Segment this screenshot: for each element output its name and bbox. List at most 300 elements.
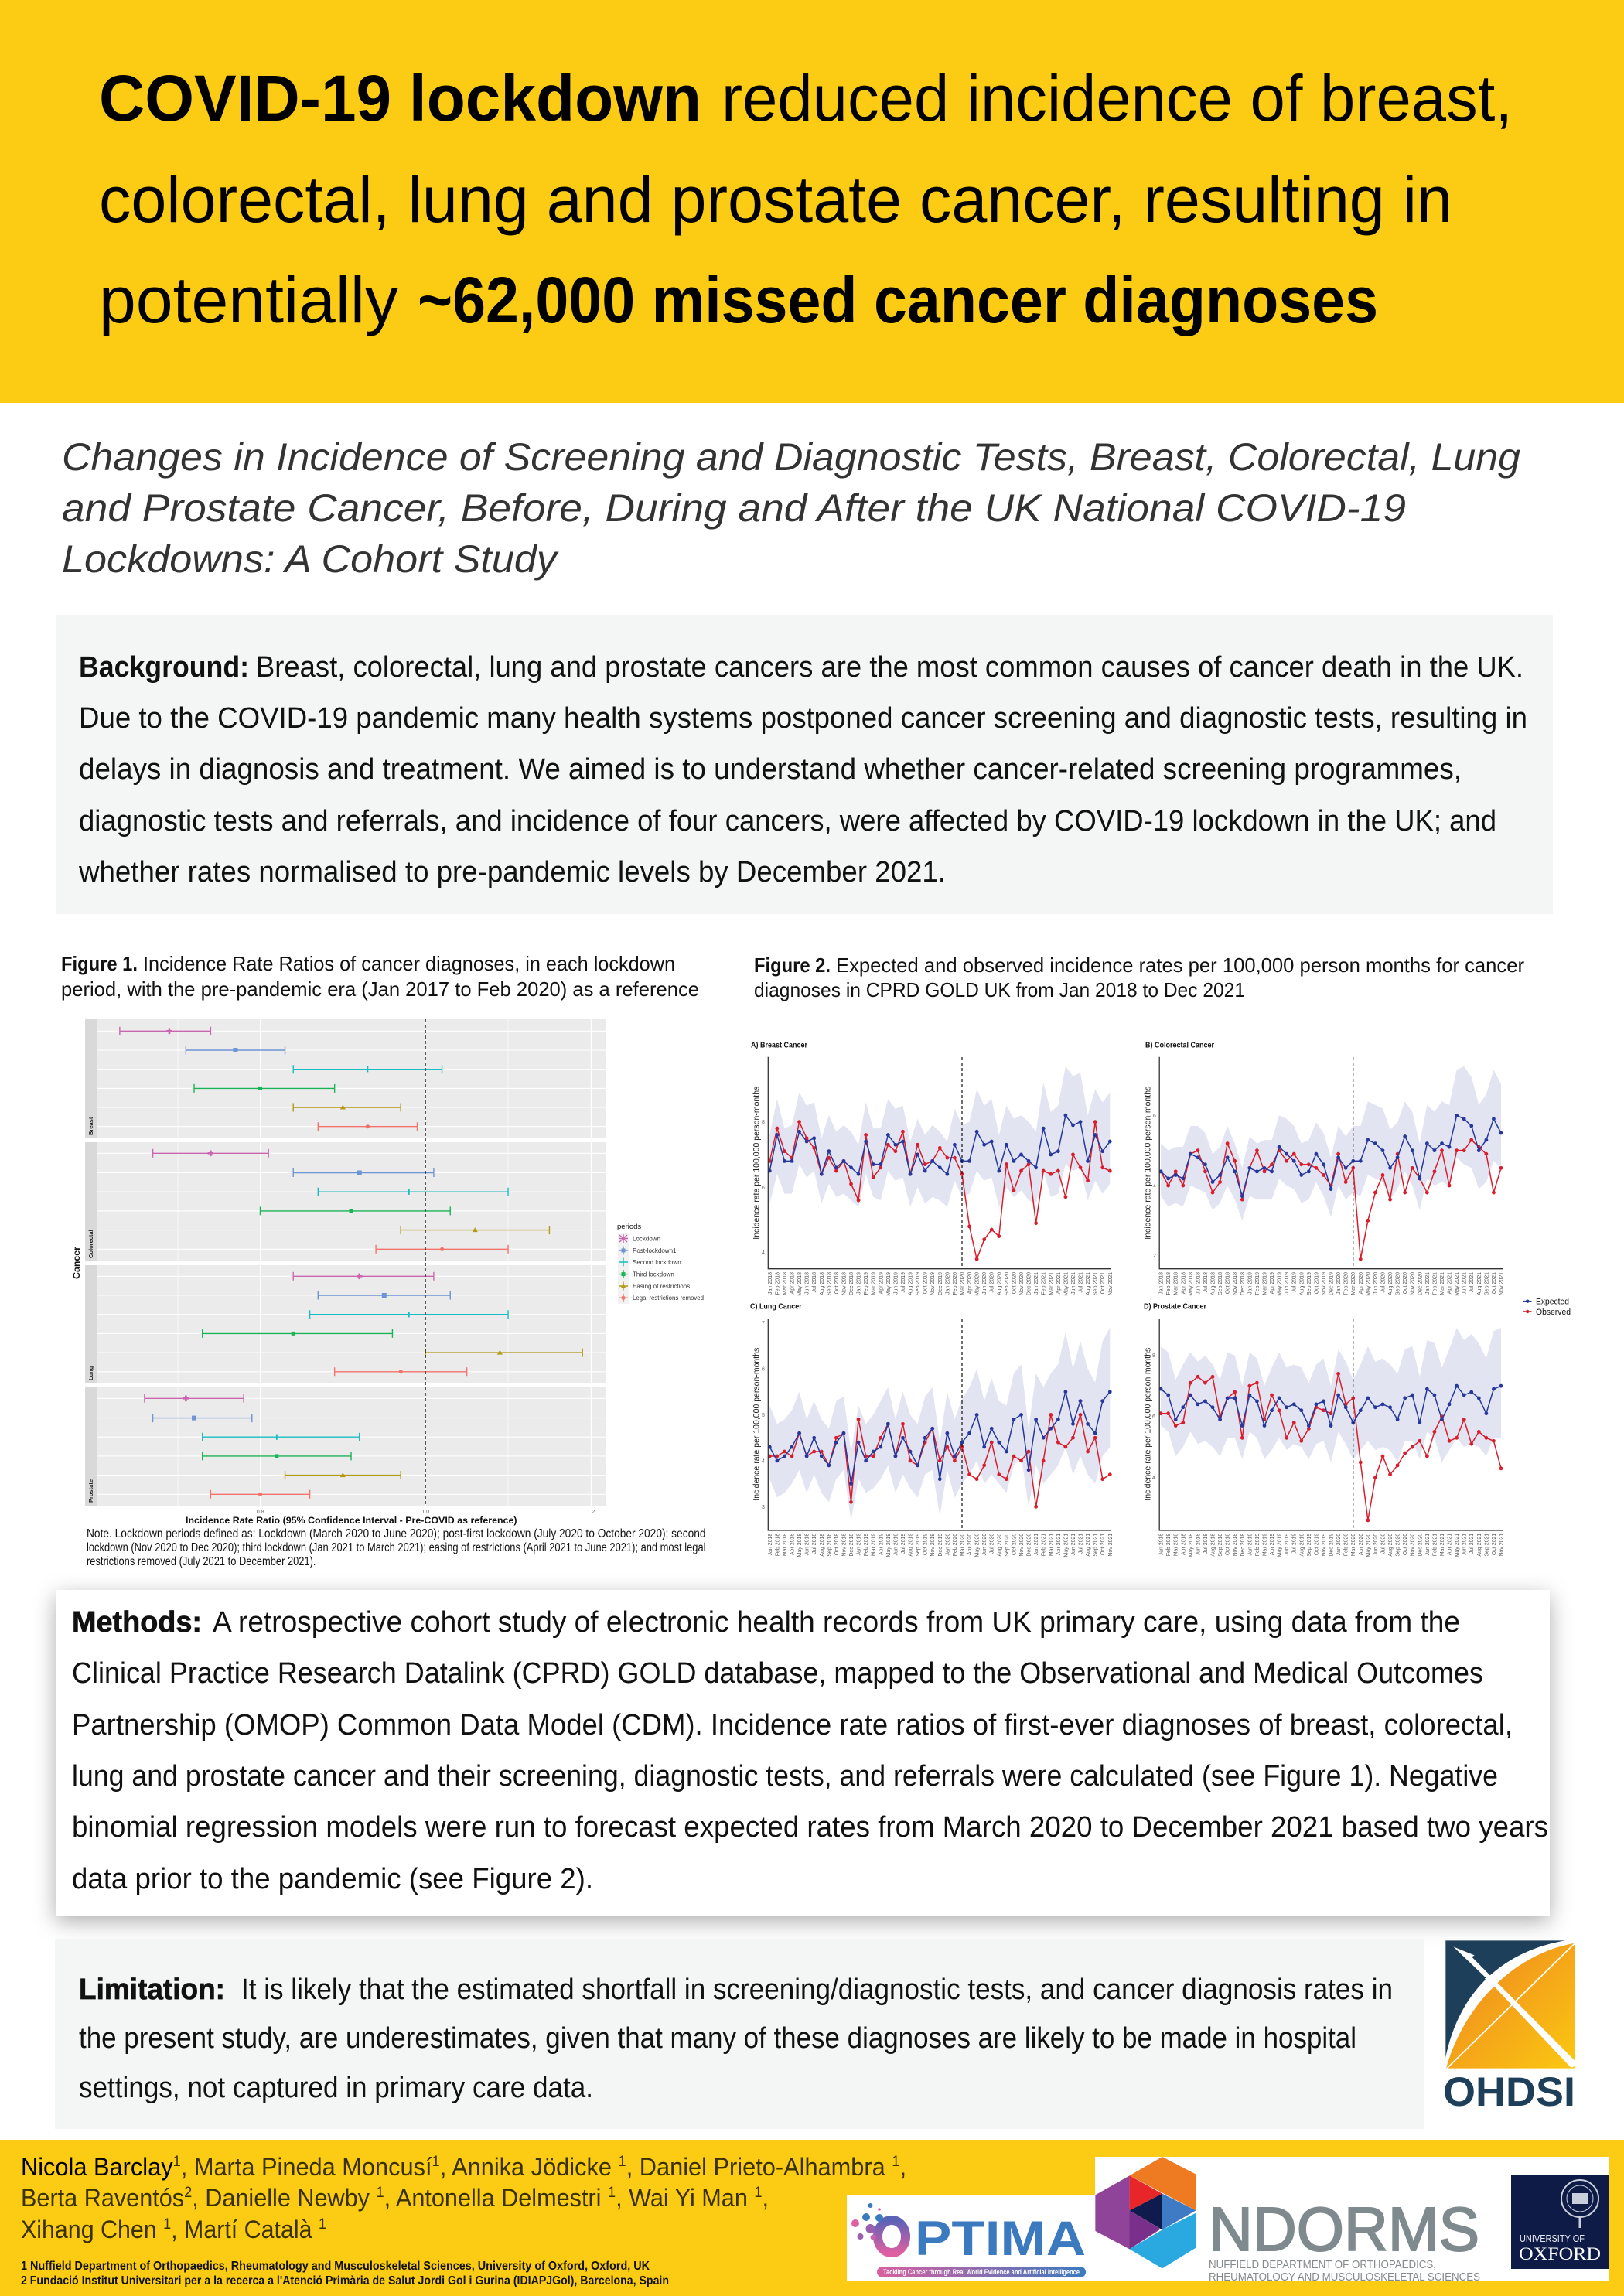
chart D month axis: Aug 2018	[1211, 1534, 1216, 1557]
chart D month axis: Aug 2020	[1388, 1534, 1394, 1557]
chart B month axis: Oct 2021	[1492, 1272, 1497, 1294]
chart D month axis: Dec 2019	[1329, 1534, 1335, 1557]
figure 1 caption	[61, 952, 699, 1001]
figure 2 caption: Expected and observed incidence rates per 100,000 person months for cancer	[836, 954, 1524, 977]
affiliations	[21, 2260, 669, 2287]
chart A month axis: May 2019	[886, 1272, 892, 1296]
chart B month axis: Jun 2020	[1373, 1272, 1379, 1295]
NDORMS subtitle: RHEUMATOLOGY AND MUSCULOSKELETAL SCIENCES	[1209, 2270, 1480, 2284]
background text: diagnostic tests and referrals, and incidence of four cancers, were affected by COVID-19 lockdown in the UK; and	[79, 805, 1496, 838]
authors: ,	[762, 2184, 769, 2212]
chart C month axis: Feb 2021	[1042, 1534, 1047, 1556]
chart B y ticks: 4	[1153, 1183, 1156, 1189]
chart B month axis: Jun 2018	[1196, 1272, 1201, 1295]
chart A y ticks	[762, 1120, 765, 1256]
lockdown series	[120, 1027, 434, 1403]
limitation text: the present study, are underestimates, given that many of these diagnoses are likely to be made in hospital	[79, 2022, 1356, 2055]
chart B month axis: Aug 2018	[1211, 1272, 1216, 1295]
forest plot legend: periods	[617, 1223, 641, 1231]
chart A month axis: Apr 2020	[967, 1272, 973, 1294]
chart C month axis: Nov 2019	[930, 1534, 936, 1557]
chart C month axis: Feb 2020	[953, 1534, 958, 1556]
chart C month axis: Oct 2020	[1012, 1534, 1017, 1555]
chart A month axis: Feb 2019	[864, 1272, 869, 1295]
chart C month axis: Aug 2018	[820, 1534, 825, 1557]
strip labels: Colorectal	[87, 1230, 94, 1258]
chart A y label: Incidence rate per 100,000 person-months	[752, 1086, 762, 1240]
figure 1 caption: Incidence Rate Ratios of cancer diagnoses, in each lockdown	[143, 952, 675, 975]
chart A month axis: Mar 2019	[872, 1272, 877, 1295]
chart C month axis: Aug 2020	[997, 1534, 1002, 1557]
chart A month axis: Jan 2018	[768, 1272, 773, 1295]
figure 1 caption: Figure 1.	[61, 952, 138, 975]
chart C month axis: Feb 2018	[775, 1534, 780, 1556]
chart C band and lines	[769, 1328, 1110, 1520]
methods text	[72, 1606, 1548, 1895]
chart A axes	[768, 1057, 1111, 1269]
chart B month axis: May 2021	[1455, 1272, 1460, 1296]
chart D month axis: May 2018	[1189, 1534, 1194, 1557]
chart A month axis: Sep 2018	[827, 1272, 832, 1295]
chart D month axis: Feb 2020	[1344, 1534, 1349, 1556]
chart A month axis: Jun 2018	[805, 1272, 810, 1295]
chart D month axis: Jan 2020	[1336, 1534, 1342, 1556]
chart B month axis: Apr 2020	[1359, 1272, 1364, 1294]
figure 1 note	[87, 1527, 705, 1568]
figure 2 caption: diagnoses in CPRD GOLD UK from Jan 2018 to Dec 2021	[754, 978, 1245, 1001]
authors: 1	[376, 2185, 384, 2201]
figure 2 legend: Observed	[1536, 1308, 1571, 1317]
chart B month axis: Oct 2018	[1226, 1272, 1231, 1294]
subtitle	[62, 435, 1520, 581]
chart A month axis: Oct 2018	[834, 1272, 840, 1294]
chart A month axis: Sep 2019	[916, 1272, 921, 1295]
chart D month axis: Oct 2021	[1492, 1534, 1497, 1555]
reference line at 1.0	[425, 1019, 426, 1506]
authors: ,	[899, 2153, 906, 2181]
panel: limitation	[55, 1939, 1424, 2129]
chart C axes	[768, 1319, 1111, 1530]
NDORMS subtitle: NUFFIELD DEPARTMENT OF ORTHOPAEDICS,	[1209, 2258, 1436, 2271]
chart B month axis: Apr 2021	[1448, 1272, 1453, 1294]
chart B month axis: Dec 2018	[1240, 1272, 1246, 1295]
OHDSI emblem	[1445, 1940, 1575, 2069]
chart B month axis: Feb 2019	[1255, 1272, 1261, 1295]
legal restrictions removed series	[210, 1122, 508, 1499]
chart D month axis: Nov 2019	[1322, 1534, 1327, 1557]
chart C month axis: Mar 2019	[872, 1534, 877, 1556]
forest plot legend	[617, 1223, 704, 1304]
chart C month axis: Jan 2018	[768, 1534, 773, 1556]
chart B month axis: Mar 2020	[1351, 1272, 1356, 1295]
chart D month axis: Apr 2021	[1448, 1534, 1453, 1555]
Oxford wordmark: OXFORD	[1519, 2244, 1601, 2264]
chart D month axis: Apr 2018	[1181, 1534, 1186, 1555]
chart C month axis: Jul 2021	[1079, 1534, 1084, 1554]
chart B month axis: Jun 2021	[1462, 1272, 1468, 1295]
chart C month axis: Sep 2021	[1093, 1534, 1099, 1557]
chart D month axis: Mar 2018	[1174, 1534, 1179, 1556]
chart C month axis: Sep 2019	[916, 1534, 921, 1557]
chart C march 2020 marker	[961, 1319, 963, 1530]
panel: methods	[56, 1590, 1550, 1916]
chart C month axis: Nov 2021	[1108, 1534, 1114, 1557]
chart A month axis: Apr 2018	[790, 1272, 795, 1294]
forest plot panels	[85, 1019, 606, 1506]
figure 1 forest plot	[71, 1019, 705, 1568]
chart C month axis: Jun 2020	[982, 1534, 988, 1556]
chart B month axis: Apr 2018	[1181, 1272, 1186, 1294]
chart C month axis: Apr 2020	[967, 1534, 973, 1555]
chart B month axis: May 2018	[1189, 1272, 1194, 1296]
chart B month axis: Jan 2020	[1336, 1272, 1342, 1295]
chart D month axis: Oct 2020	[1403, 1534, 1408, 1555]
chart D month axis: Jun 2018	[1196, 1534, 1201, 1556]
figure 1 note: Note. Lockdown periods defined as: Lockdown (March 2020 to June 2020); post-first lockdown (July 2020 to October 2020); second	[87, 1527, 705, 1540]
chart C month axis: May 2018	[797, 1534, 803, 1557]
limitation text: It is likely that the estimated shortfall in screening/diagnostic tests, and cancer diagnosis rates in	[241, 1974, 1393, 2006]
forest plot legend: Third lockdown	[633, 1271, 674, 1278]
chart D month axis: Nov 2018	[1233, 1534, 1238, 1557]
chart C: lung cancer	[750, 1302, 1111, 1530]
chart A band and lines	[769, 1066, 1110, 1259]
OPTIMA wordmark: PTIMA	[915, 2212, 1086, 2266]
authors: , Antonella Delmestri	[384, 2184, 608, 2212]
NDORMS hexagon	[1095, 2157, 1196, 2268]
chart B y ticks	[1153, 1114, 1156, 1259]
chart D month axis: Sep 2019	[1307, 1534, 1312, 1557]
methods text: binomial regression models were run to forecast expected rates from March 2020 to December 2021 based two years	[72, 1811, 1548, 1844]
chart D month axis: Jan 2018	[1159, 1534, 1165, 1556]
chart C month axis: Mar 2020	[960, 1534, 965, 1556]
chart A month axis: Mar 2020	[960, 1272, 965, 1295]
chart B month axis: Feb 2018	[1166, 1272, 1172, 1295]
chart B march 2020 marker	[1353, 1057, 1354, 1268]
background text: Breast, colorectal, lung and prostate cancers are the most common causes of cancer death in the UK.	[256, 651, 1523, 684]
chart B month axis: Apr 2019	[1270, 1272, 1275, 1294]
chart D: prostate cancer	[1143, 1302, 1503, 1530]
authors: Xihang Chen	[21, 2216, 164, 2243]
chart C month axis: Jan 2019	[857, 1534, 862, 1556]
authors: 1	[754, 2185, 762, 2201]
chart D axes	[1159, 1319, 1503, 1530]
Oxford wordmark	[1519, 2233, 1601, 2264]
background text: Due to the COVID-19 pandemic many health systems postponed cancer screening and diagnostic tests, resulting in	[79, 702, 1527, 735]
figure 2 caption: Figure 2.	[754, 954, 831, 977]
methods text: lung and prostate cancer and their screening, diagnostic tests, and referrals were calculated (see Figure 1). Negative	[72, 1760, 1498, 1793]
chart C month axis: Jan 2021	[1034, 1534, 1039, 1556]
chart C y ticks: 4	[762, 1458, 765, 1465]
chart D month axis: Jun 2020	[1373, 1534, 1379, 1556]
chart B month axis: Sep 2020	[1396, 1272, 1401, 1295]
forest plot legend: Lockdown	[633, 1235, 660, 1242]
authors: 1	[619, 2154, 626, 2170]
chart C month axis: Jul 2020	[990, 1534, 995, 1554]
chart D month axis: Aug 2019	[1299, 1534, 1305, 1557]
background text: whether rates normalised to pre-pandemic levels by December 2021.	[78, 856, 946, 889]
chart A y ticks: 6	[762, 1186, 765, 1191]
chart D month axis: Jul 2019	[1292, 1534, 1298, 1554]
OPTIMA tagline: Tackling Cancer through Real World Evidence and Artificial Intelligence	[883, 2268, 1080, 2276]
OPTIMA icon	[851, 2203, 906, 2253]
chart A month axis: Jul 2019	[901, 1272, 906, 1292]
second lockdown series	[203, 1065, 508, 1441]
chart C month axis: Apr 2021	[1056, 1534, 1062, 1555]
logo: NDORMS	[1095, 2157, 1609, 2284]
limitation text	[79, 1974, 1393, 2104]
chart B month axis: Nov 2020	[1411, 1272, 1416, 1295]
chart C month axis: Oct 2018	[834, 1534, 840, 1555]
chart C y ticks: 7	[762, 1321, 765, 1326]
chart D month axis: May 2021	[1455, 1534, 1460, 1557]
chart A month axis: Jul 2018	[812, 1272, 817, 1292]
chart C month axis: Jul 2019	[901, 1534, 906, 1554]
forest plot legend: Legal restrictions removed	[633, 1295, 704, 1302]
chart A month axis: Feb 2018	[775, 1272, 780, 1295]
figure 2 caption	[754, 954, 1524, 1001]
chart A title: A) Breast Cancer	[751, 1041, 807, 1050]
chart D month axis: Dec 2018	[1240, 1534, 1246, 1557]
chart A month axis: May 2018	[797, 1272, 803, 1296]
confidence interval bars	[120, 1027, 582, 1499]
chart A month axis: May 2021	[1063, 1272, 1069, 1296]
chart A month axis: May 2020	[975, 1272, 981, 1296]
chart B title: B) Colorectal Cancer	[1145, 1041, 1214, 1050]
chart A march 2020 marker	[961, 1057, 963, 1268]
chart D month axis: Jan 2021	[1425, 1534, 1431, 1556]
chart C month axis: Mar 2018	[783, 1534, 788, 1556]
chart A month axis: Mar 2018	[783, 1272, 788, 1295]
x axis ticks: 0.8	[257, 1510, 264, 1515]
forest plot legend: Post-lockdown1	[633, 1247, 677, 1254]
chart D march 2020 marker	[1353, 1319, 1354, 1530]
chart C month axis: May 2020	[975, 1534, 981, 1557]
authors: , Annika Jödicke	[440, 2153, 619, 2181]
chart B month axis: Aug 2021	[1477, 1272, 1482, 1295]
NDORMS subtitle	[1209, 2258, 1480, 2284]
chart D band and lines	[1161, 1328, 1501, 1520]
authors	[21, 2153, 906, 2243]
chart B month axis: Nov 2019	[1322, 1272, 1327, 1295]
authors: , Danielle Newby	[192, 2184, 376, 2212]
chart A month axis: Jun 2019	[893, 1272, 899, 1295]
forest plot legend: Second lockdown	[633, 1259, 681, 1266]
chart B month axis: Dec 2020	[1418, 1272, 1423, 1295]
chart B month axis: Mar 2019	[1262, 1272, 1267, 1295]
chart C month axis: Nov 2018	[841, 1534, 847, 1557]
methods text: A retrospective cohort study of electronic health records from UK primary care, using data from the	[213, 1606, 1460, 1639]
x axis ticks: 1.0	[421, 1510, 429, 1515]
forest plot legend: Easing of restrictions	[633, 1283, 690, 1290]
chart C y label: Incidence rate per 100,000 person-months	[752, 1347, 762, 1501]
title: potentially	[99, 264, 398, 336]
chart A month axis: Jun 2021	[1071, 1272, 1076, 1295]
chart B y label: Incidence rate per 100,000 person-months	[1143, 1086, 1152, 1240]
figure 2 legend	[1523, 1298, 1571, 1317]
chart A month axis: Oct 2020	[1012, 1272, 1017, 1294]
chart B month axis: Jul 2021	[1469, 1272, 1475, 1292]
chart A month axis: Aug 2018	[820, 1272, 825, 1295]
chart A month axis: Apr 2021	[1056, 1272, 1062, 1294]
chart A month axis: Nov 2018	[841, 1272, 847, 1295]
figure 1 note: restrictions removed (July 2021 to December 2021).	[87, 1555, 316, 1568]
chart B month axis: Jun 2019	[1285, 1272, 1290, 1295]
chart C month axis: Jun 2021	[1071, 1534, 1076, 1556]
chart B month axis: Jul 2018	[1203, 1272, 1209, 1292]
authors: , Daniel Prieto-Alhambra	[626, 2153, 892, 2181]
methods text: Partnership (OMOP) Common Data Model (CDM). Incidence rate ratios of first-ever diagnoses of breast, colorectal,	[72, 1709, 1513, 1742]
chart C month axis: Oct 2019	[923, 1534, 929, 1555]
chart A month axis: Jan 2021	[1034, 1272, 1039, 1295]
chart D month axis: Oct 2018	[1226, 1534, 1231, 1555]
chart A month axis: Aug 2021	[1086, 1272, 1091, 1295]
chart C month axis: May 2019	[886, 1534, 892, 1557]
chart B month axis: Oct 2019	[1314, 1272, 1319, 1294]
limitation text: settings, not captured in primary care data.	[79, 2072, 593, 2104]
subtitle: and Prostate Cancer, Before, During and After the UK National COVID-19	[62, 486, 1406, 530]
chart B month axis: May 2019	[1278, 1272, 1283, 1296]
chart A month axis: Jun 2020	[982, 1272, 988, 1295]
affiliations: 1 Nuffield Department of Orthopaedics, Rheumatology and Musculoskeletal Sciences, University of Oxford, Oxford, UK	[21, 2260, 650, 2273]
title: reduced incidence of breast,	[722, 62, 1513, 135]
chart D month axis: Jul 2018	[1203, 1534, 1209, 1554]
chart C month axis: Dec 2020	[1027, 1534, 1032, 1557]
chart C y ticks	[762, 1321, 765, 1510]
chart A month axis: Dec 2020	[1027, 1272, 1032, 1295]
chart C y ticks: 3	[762, 1505, 765, 1510]
figure 2 legend: Expected	[1536, 1298, 1569, 1307]
OHDSI wordmark: OHDSI	[1443, 2069, 1575, 2115]
affiliations: 2 Fundació Institut Universitari per a la recerca a l'Atenció Primària de Salut Jordi Gol i Gurina (IDIAPJGol), Barcelona, Spain	[21, 2274, 669, 2287]
limitation text: Limitation:	[79, 1974, 225, 2006]
figure 1 caption: period, with the pre-pandemic era (Jan 2017 to Feb 2020) as a reference	[61, 977, 699, 1001]
background text: delays in diagnosis and treatment. We aimed is to understand whether cancer-related screening programmes,	[79, 753, 1462, 786]
chart B month axis: Nov 2021	[1499, 1272, 1504, 1295]
chart A month axis: Aug 2019	[909, 1272, 914, 1295]
authors: 2	[184, 2185, 192, 2201]
NDORMS wordmark: NDORMS	[1209, 2195, 1479, 2264]
chart B month axis: Mar 2018	[1174, 1272, 1179, 1295]
chart C month axis: Aug 2021	[1086, 1534, 1091, 1557]
chart B month axis: Nov 2018	[1233, 1272, 1238, 1295]
chart B y ticks: 6	[1153, 1114, 1156, 1119]
chart C month axis: Dec 2019	[938, 1534, 943, 1557]
chart B month axis: Jul 2019	[1292, 1272, 1298, 1292]
chart A month axis: Dec 2018	[849, 1272, 855, 1295]
chart D month axis: Mar 2021	[1440, 1534, 1445, 1556]
chart C month axis: Oct 2021	[1100, 1534, 1106, 1555]
authors: 1	[173, 2154, 181, 2170]
chart A month axis: Nov 2021	[1108, 1272, 1114, 1295]
chart D month axis: Sep 2018	[1218, 1534, 1223, 1557]
chart A month axis: Jul 2021	[1079, 1272, 1084, 1292]
chart A y ticks: 4	[762, 1250, 765, 1256]
chart A month axis: Jul 2020	[990, 1272, 995, 1292]
chart B month axis: Sep 2021	[1484, 1272, 1489, 1295]
chart C month axis: Aug 2019	[909, 1534, 914, 1557]
chart B month axis: May 2020	[1366, 1272, 1371, 1296]
header banner	[0, 0, 1624, 403]
chart B axes	[1159, 1057, 1503, 1269]
chart A month axis: Nov 2019	[930, 1272, 936, 1295]
chart C month axis: Jun 2019	[893, 1534, 899, 1556]
chart D title: D) Prostate Cancer	[1144, 1302, 1206, 1312]
chart D month axis: Sep 2021	[1484, 1534, 1489, 1557]
Oxford crest	[1561, 2180, 1598, 2228]
chart D month axis: Jul 2021	[1469, 1534, 1475, 1554]
title: colorectal, lung and prostate cancer, resulting in	[99, 163, 1452, 236]
chart A month axis: Oct 2019	[923, 1272, 929, 1294]
panel: background	[56, 615, 1553, 914]
chart C month axis: Feb 2019	[864, 1534, 869, 1556]
x axis ticks: 1.2	[588, 1510, 595, 1515]
chart B month axis: Jan 2019	[1247, 1272, 1253, 1295]
chart D month axis: May 2019	[1278, 1534, 1283, 1557]
chart D month axis: Mar 2019	[1262, 1534, 1267, 1556]
methods text: data prior to the pandemic (see Figure 2).	[72, 1863, 593, 1895]
x axis ticks	[257, 1510, 595, 1515]
chart C month axis: May 2021	[1063, 1534, 1069, 1557]
figure 1 note: lockdown (Nov 2020 to Dec 2020); third lockdown (Jan 2021 to March 2021); easing of restrictions (April 2021 to June 2021); and most legal	[87, 1541, 705, 1554]
chart D month axis: Jun 2021	[1462, 1534, 1468, 1556]
footer band	[0, 2140, 1624, 2296]
title: ~62,000 missed cancer diagnoses	[418, 264, 1378, 336]
chart B y ticks: 2	[1153, 1254, 1156, 1259]
chart D month axis: Jun 2019	[1285, 1534, 1290, 1556]
chart B month axis: Sep 2019	[1307, 1272, 1312, 1295]
chart A month axis: Feb 2020	[953, 1272, 958, 1295]
chart A month axis: Sep 2020	[1005, 1272, 1010, 1295]
logo: OPTIMA	[847, 2195, 1095, 2281]
title	[99, 62, 1513, 336]
chart D month axis: May 2020	[1366, 1534, 1371, 1557]
chart B month axis: Feb 2020	[1344, 1272, 1349, 1295]
chart A month axis: Mar 2021	[1049, 1272, 1054, 1295]
chart D month axis: Sep 2020	[1396, 1534, 1401, 1557]
chart A y ticks: 8	[762, 1120, 765, 1125]
chart C month axis: Nov 2020	[1019, 1534, 1025, 1557]
logo: University of Oxford	[1511, 2175, 1609, 2269]
chart C month axis: Sep 2020	[1005, 1534, 1010, 1557]
chart C title: C) Lung Cancer	[750, 1302, 802, 1312]
chart C y ticks: 6	[762, 1367, 765, 1372]
authors: 1	[608, 2185, 616, 2201]
chart C month axis: Dec 2018	[849, 1534, 855, 1557]
authors: Berta Raventós	[21, 2184, 192, 2212]
chart D month axis: Aug 2021	[1477, 1534, 1482, 1557]
chart A: breast cancer	[751, 1041, 1111, 1269]
chart B: colorectal cancer	[1143, 1041, 1503, 1269]
methods text: Clinical Practice Research Datalink (CPRD) GOLD database, mapped to the Observational and Medical Outcomes	[72, 1657, 1483, 1690]
authors: 1	[892, 2154, 899, 2170]
chart D month axis: Mar 2020	[1351, 1534, 1356, 1556]
methods text: Methods:	[72, 1606, 202, 1639]
chart C month axis: Mar 2021	[1049, 1534, 1054, 1556]
chart B month axis: Aug 2019	[1299, 1272, 1305, 1295]
background text	[78, 651, 1527, 889]
chart B month axis: Jan 2021	[1425, 1272, 1431, 1295]
chart D month axis: Oct 2019	[1314, 1534, 1319, 1555]
title: COVID-19 lockdown	[99, 62, 701, 135]
post-lockdown series	[153, 1046, 450, 1422]
chart D y ticks: 8	[1152, 1353, 1155, 1359]
chart D month axis: Feb 2019	[1255, 1534, 1261, 1556]
chart D y label: Incidence rate per 100,000 person-months	[1143, 1347, 1152, 1501]
chart B month axis: Sep 2018	[1218, 1272, 1223, 1295]
chart B month axis: Aug 2020	[1388, 1272, 1394, 1295]
chart B band and lines	[1161, 1066, 1501, 1259]
chart A month axis: Apr 2019	[879, 1272, 884, 1294]
